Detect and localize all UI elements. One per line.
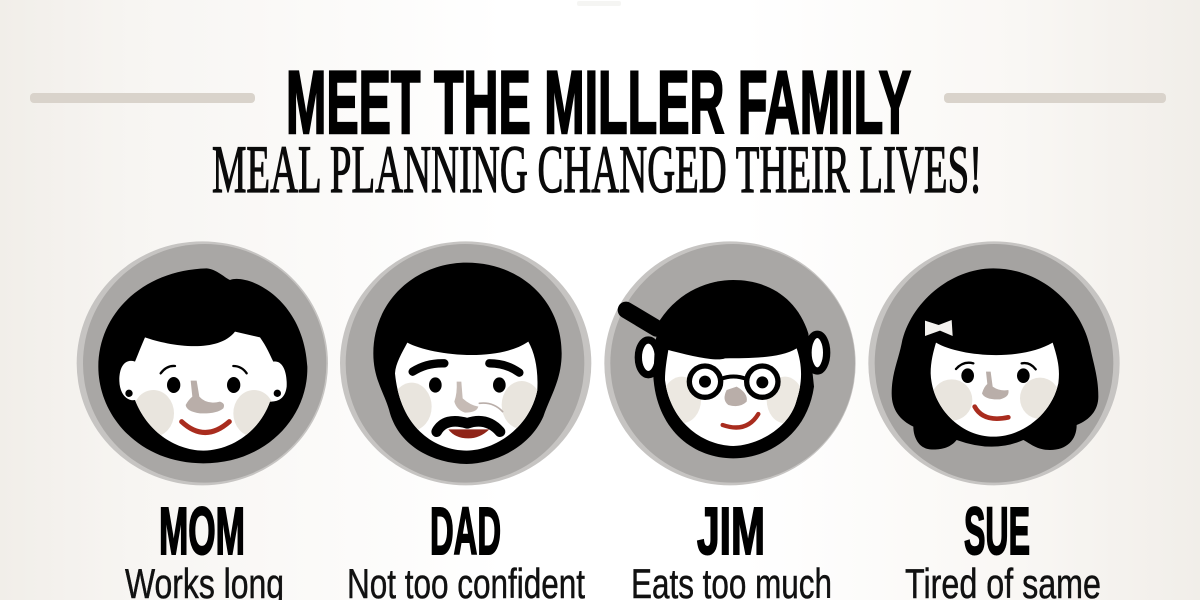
text: SUE xyxy=(964,494,1030,569)
portrait: Mom xyxy=(77,241,328,485)
portrait: Sue xyxy=(868,241,1120,485)
text: DAD xyxy=(430,494,501,569)
icon: hair bow xyxy=(925,320,953,336)
right heading rule xyxy=(944,93,1166,103)
portrait: Jim xyxy=(604,241,856,485)
faint mark at top edge xyxy=(577,1,621,6)
portrait: Dad xyxy=(340,241,591,485)
name: Jim: JIM xyxy=(697,494,765,569)
left heading rule xyxy=(30,93,255,103)
name: Mom: MOM xyxy=(159,494,245,569)
